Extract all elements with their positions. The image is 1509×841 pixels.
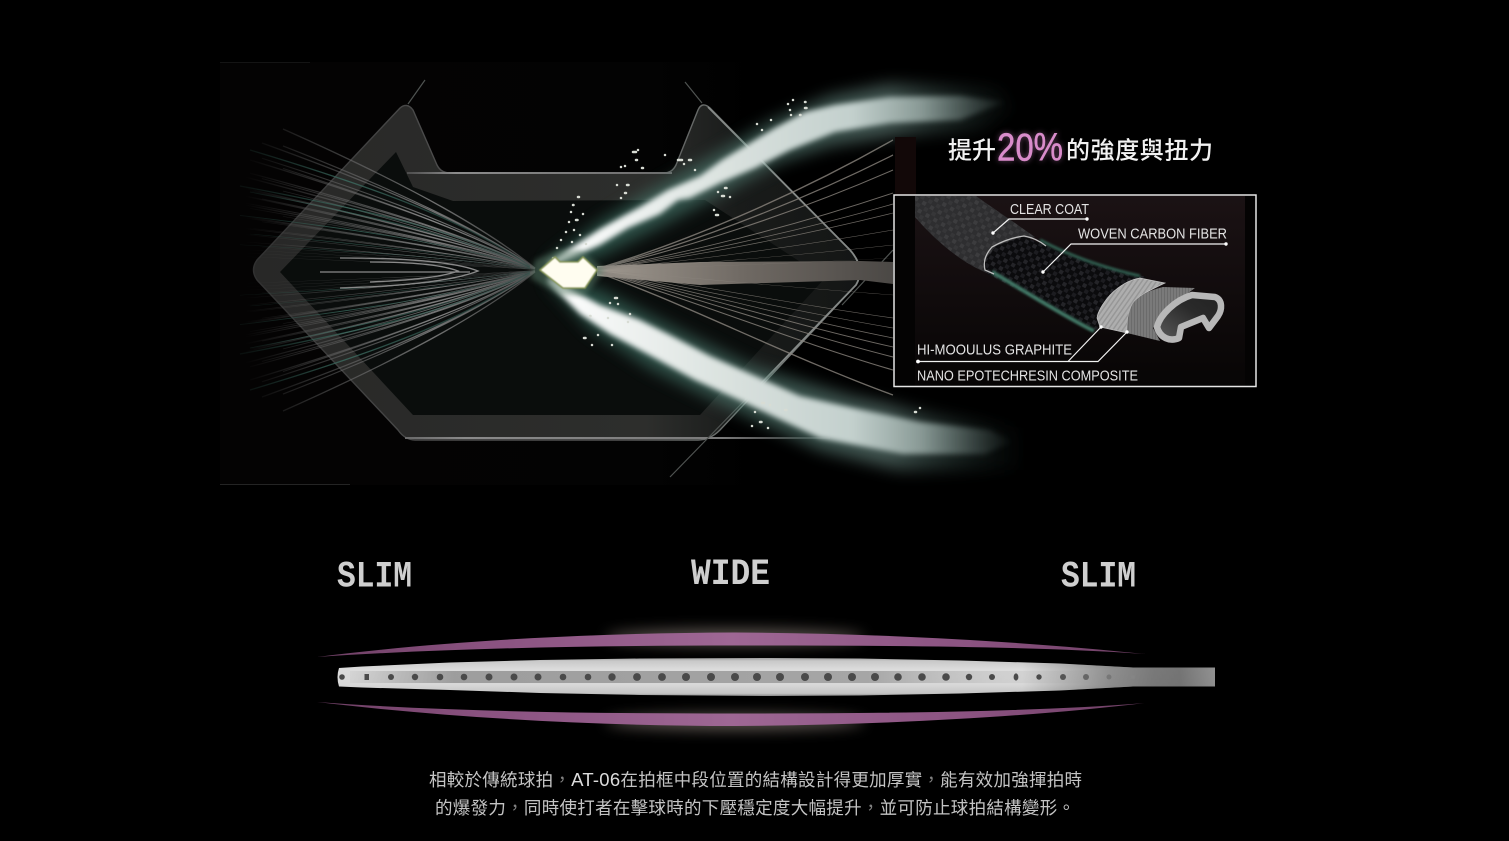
layer labels (917, 202, 1227, 384)
leader lines (918, 219, 1226, 362)
lower pink arc (317, 702, 1145, 726)
label: slim left: SLIM (337, 556, 412, 598)
centre glow (605, 629, 865, 730)
layer labels: NANO EPOTECHRESIN COMPOSITE (917, 368, 1138, 384)
right beam and string lines (597, 140, 893, 395)
racket frame bar (338, 658, 1215, 696)
frame width diagram (317, 629, 1215, 730)
layer labels: HI-MOOULUS GRAPHITE (917, 342, 1072, 358)
section labels (337, 554, 1136, 598)
heading: strength and torque claim (948, 126, 1213, 170)
upper pink arc (317, 632, 1145, 657)
sparkle particles (553, 100, 920, 428)
lower energy streak (548, 276, 1020, 470)
leader dots (916, 217, 1228, 363)
photo backdrop (220, 62, 760, 485)
upper energy streak (548, 84, 1015, 272)
layer labels: WOVEN CARBON FIBER (1078, 226, 1227, 242)
glowing impact point (530, 250, 605, 295)
frame outline (894, 195, 1256, 386)
detail box: carbon tube layers (894, 195, 1256, 386)
heading text left: 提升 (948, 130, 996, 166)
left fan of string lines (240, 129, 535, 411)
tube: cut end layers (1097, 278, 1221, 341)
description text (429, 769, 1082, 818)
description line 1: 相較於傳統球拍，AT-06在拍框中段位置的結構設計得更加厚實，能有效加強揮拍時 (429, 769, 1082, 790)
highlighted percentage: 20% (997, 126, 1063, 170)
racket head cross-section frame (254, 80, 893, 477)
tube: woven carbon section (983, 236, 1147, 331)
label: wide centre: WIDE (691, 554, 770, 596)
description line 2: 的爆發力，同時使打者在擊球時的下壓穩定度大幅提升，並可防止球拍結構變形。 (435, 798, 1075, 818)
dark strip above the detail box (895, 137, 916, 195)
hero illustration: racket frame impact (220, 62, 1020, 485)
string holes (339, 673, 1135, 681)
tube: clear coat section (915, 196, 1035, 273)
heading text right: 的強度與扭力 (1066, 130, 1213, 166)
layer labels: CLEAR COAT (1010, 202, 1089, 218)
label: slim right: SLIM (1061, 556, 1136, 598)
